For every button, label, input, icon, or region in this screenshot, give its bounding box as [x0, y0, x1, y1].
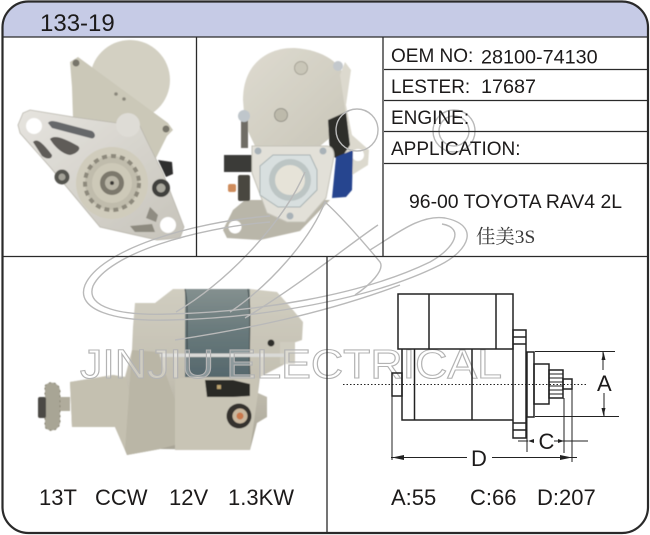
spec table: OEM number: OEM NO:: [391, 46, 473, 67]
OEM value: 28100-74130: [481, 46, 598, 68]
spec table: application: APPLICATION:: [391, 139, 521, 160]
motor photo: side view: [38, 289, 303, 455]
dimension value A: A:55: [391, 485, 436, 510]
spec table: engine: ENGINE:: [391, 108, 469, 129]
spec: power: 1.3KW: [228, 485, 294, 510]
spec table: Lester: LESTER:: [391, 77, 470, 98]
title: 133-19: [40, 10, 115, 37]
application note: 佳美3S: [476, 226, 535, 248]
watermark: company name: JINJIU ELECTRICAL: [80, 341, 502, 387]
dimension drawing: [343, 294, 619, 462]
spec: voltage: 12V: [169, 485, 208, 510]
spec: teeth: 13T: [39, 485, 77, 510]
dimension value C: C:66: [470, 485, 516, 510]
header band: [3, 2, 648, 37]
motor photo: front view: [18, 40, 184, 240]
application value: 96-00 TOYOTA RAV4 2L: [409, 191, 622, 213]
motor photo: rear view: [223, 48, 369, 240]
dimension label C: C: [538, 429, 554, 454]
dimension value D: D:207: [537, 485, 596, 510]
spec: rotation: CCW: [95, 485, 148, 510]
dimension label A: A: [597, 371, 612, 396]
Lester value: 17687: [481, 76, 536, 98]
dimension label D: D: [471, 446, 487, 471]
watermark: swoosh logo: [83, 109, 475, 340]
dimension arrows: [392, 352, 606, 460]
